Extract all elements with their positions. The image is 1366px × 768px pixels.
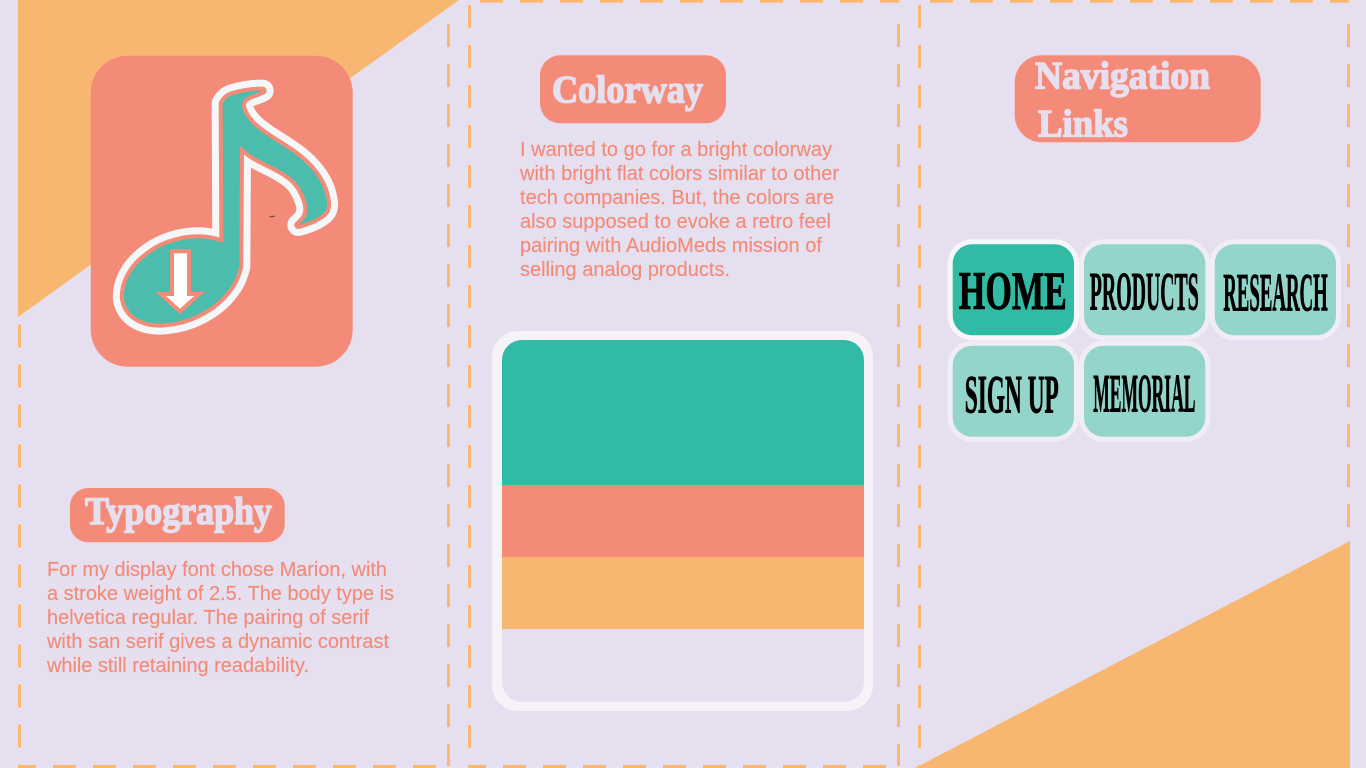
orange corner triangle: bottom right [915, 541, 1350, 768]
nav button: Memorial [1082, 343, 1208, 439]
icon: app logo music note [91, 56, 353, 367]
nav button: Sign Up: SIGN UP [965, 364, 1059, 424]
heading: Colorway: Colorway [552, 68, 703, 112]
text block: colorway description: with bright flat colors similar to other [519, 163, 839, 185]
text block: colorway description [519, 139, 839, 281]
nav button: Home (active) [950, 242, 1076, 338]
heading: Colorway [540, 55, 726, 123]
text block: colorway description: tech companies. But, the colors are [520, 187, 834, 209]
text block: colorway description: selling analog products. [520, 259, 730, 281]
text block: typography description: while still retaining readability. [46, 655, 309, 677]
heading: Typography: Typography [85, 490, 272, 533]
nav button: Research [1212, 242, 1338, 338]
heading: Navigation Links: Links [1038, 102, 1128, 146]
panel: colorway dashed frame [468, 1, 899, 768]
text block: typography description: helvetica regular. The pairing of serif [47, 607, 369, 629]
heading: Navigation Links [1015, 54, 1261, 146]
text block: colorway description: pairing with AudioMeds mission of [520, 235, 822, 257]
orange corner triangle: top left [18, 0, 459, 317]
text block: typography description [46, 559, 394, 677]
nav button: Home (active): HOME [959, 261, 1067, 321]
text block: typography description: For my display font chose Marion, with [47, 559, 387, 581]
nav button: Products [1082, 242, 1208, 338]
panel: logo and typography dashed frame [18, 1, 449, 768]
text block: typography description: a stroke weight of 2.5. The body type is [47, 583, 394, 605]
panel: navigation dashed frame [918, 1, 1349, 768]
heading: Navigation Links: Navigation [1035, 54, 1210, 98]
nav button: Sign Up [950, 343, 1076, 439]
text block: colorway description: I wanted to go for a bright colorway [520, 139, 832, 161]
text block: colorway description: also supposed to evoke a retro feel [520, 211, 831, 233]
text block: typography description: with san serif gives a dynamic contrast [46, 631, 389, 653]
chart: colorway swatches [492, 331, 873, 711]
